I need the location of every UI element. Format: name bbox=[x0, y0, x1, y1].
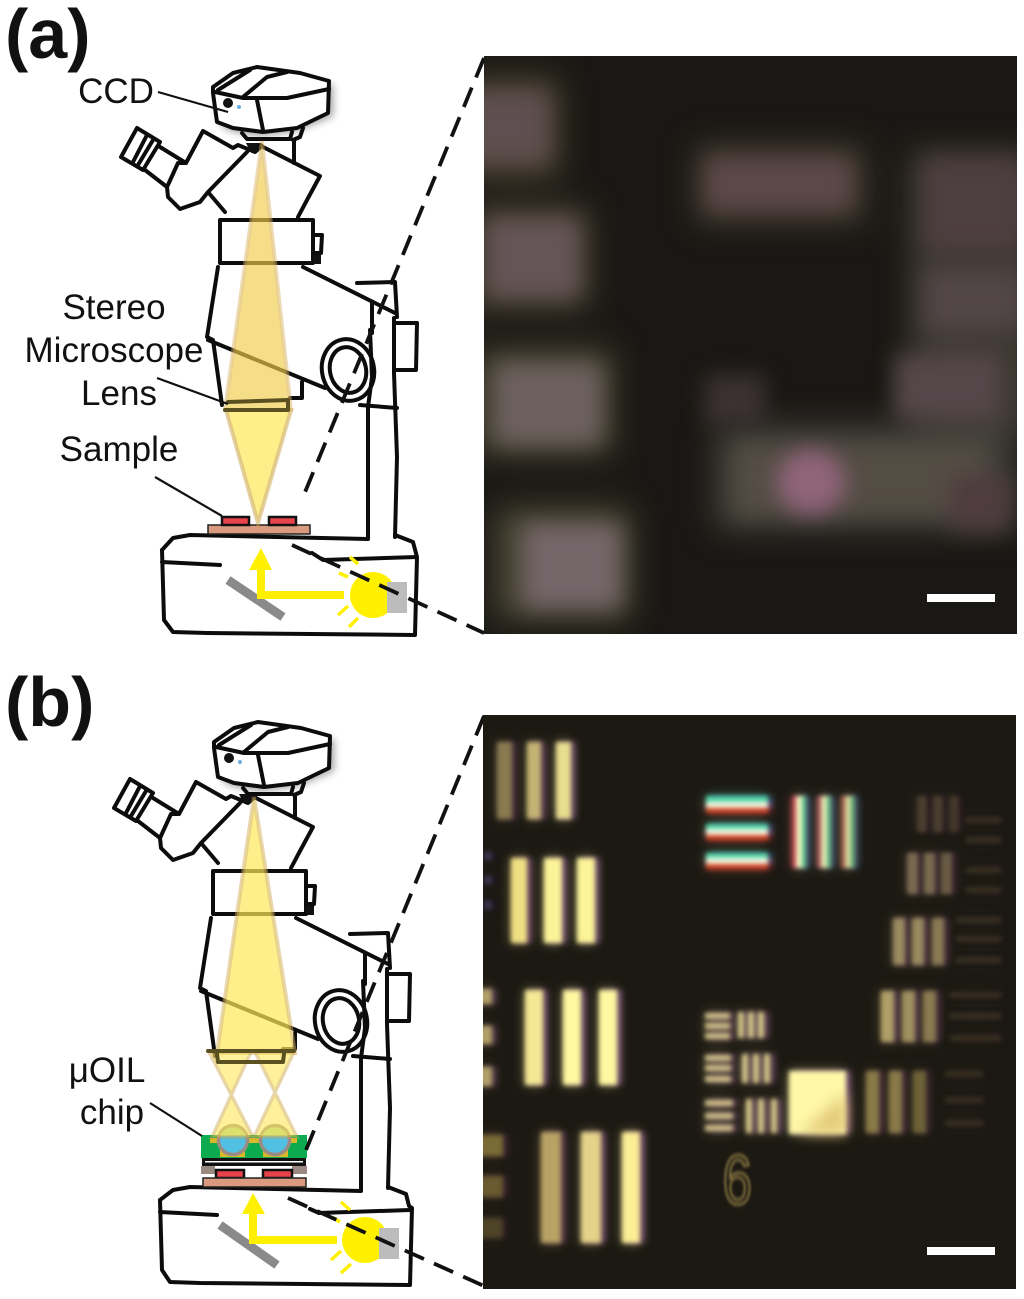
label: stereo microscope lens: Stereo bbox=[62, 288, 166, 327]
microscope base b bbox=[160, 1187, 412, 1285]
bright square shade bbox=[800, 1092, 846, 1134]
microscope base a bbox=[162, 535, 417, 635]
label: uOIL chip bbox=[69, 1051, 202, 1136]
icon: mirror a bbox=[228, 580, 283, 617]
label: stereo microscope lens: Microscope bbox=[25, 331, 203, 370]
label: panel b: (b) bbox=[5, 663, 94, 741]
label: sample: Sample bbox=[60, 430, 178, 469]
vertical colored bars bbox=[792, 796, 855, 868]
dashed zoom lines a bbox=[292, 58, 484, 633]
label: CCD bbox=[78, 72, 228, 112]
bright square bbox=[789, 1071, 846, 1134]
image panel a: blurred result bbox=[464, 56, 1024, 634]
objective lens b bbox=[208, 1051, 294, 1062]
light beam a bbox=[225, 141, 291, 523]
faint horizontal marks right bbox=[945, 820, 1001, 1123]
small vertical groups bbox=[741, 1012, 774, 1133]
arrow: yellow light path b bbox=[242, 1193, 337, 1240]
icon: lamp a bbox=[338, 557, 407, 627]
fading bar groups right bbox=[866, 796, 959, 1133]
icon: lamp b bbox=[331, 1202, 399, 1273]
label: uOIL chip: chip bbox=[80, 1093, 144, 1132]
horizontal colored bars bbox=[706, 796, 768, 869]
light beams b bbox=[209, 797, 297, 1137]
image panel b: resolution target bbox=[478, 715, 1016, 1289]
sample stage a bbox=[208, 517, 310, 534]
faint left marks bbox=[484, 856, 492, 905]
label: uOIL chip: μOIL bbox=[69, 1051, 145, 1090]
numeral on target: 6 bbox=[723, 1142, 752, 1220]
arrow: yellow light path a bbox=[249, 548, 344, 595]
chip stack: uOIL chip and sample bbox=[201, 1126, 307, 1187]
label: CCD: CCD bbox=[78, 72, 154, 111]
label: stereo microscope lens: Lens bbox=[81, 374, 157, 413]
panel: microscope a bbox=[121, 67, 417, 635]
label: stereo microscope lens bbox=[25, 288, 228, 413]
panel: microscope b bbox=[114, 722, 412, 1285]
icon: mirror b bbox=[220, 1225, 277, 1265]
bar row 3 bbox=[478, 989, 617, 1086]
scale bar b bbox=[927, 1247, 995, 1255]
dashed zoom lines b bbox=[288, 716, 484, 1286]
scale bar a bbox=[927, 594, 995, 602]
bar row 1 bbox=[497, 742, 571, 819]
bar row 4 bbox=[478, 1132, 640, 1243]
label: sample bbox=[60, 430, 222, 516]
bar row 2 bbox=[511, 858, 595, 943]
small horizontal groups bbox=[705, 1016, 733, 1128]
objective lens a bbox=[225, 400, 288, 410]
